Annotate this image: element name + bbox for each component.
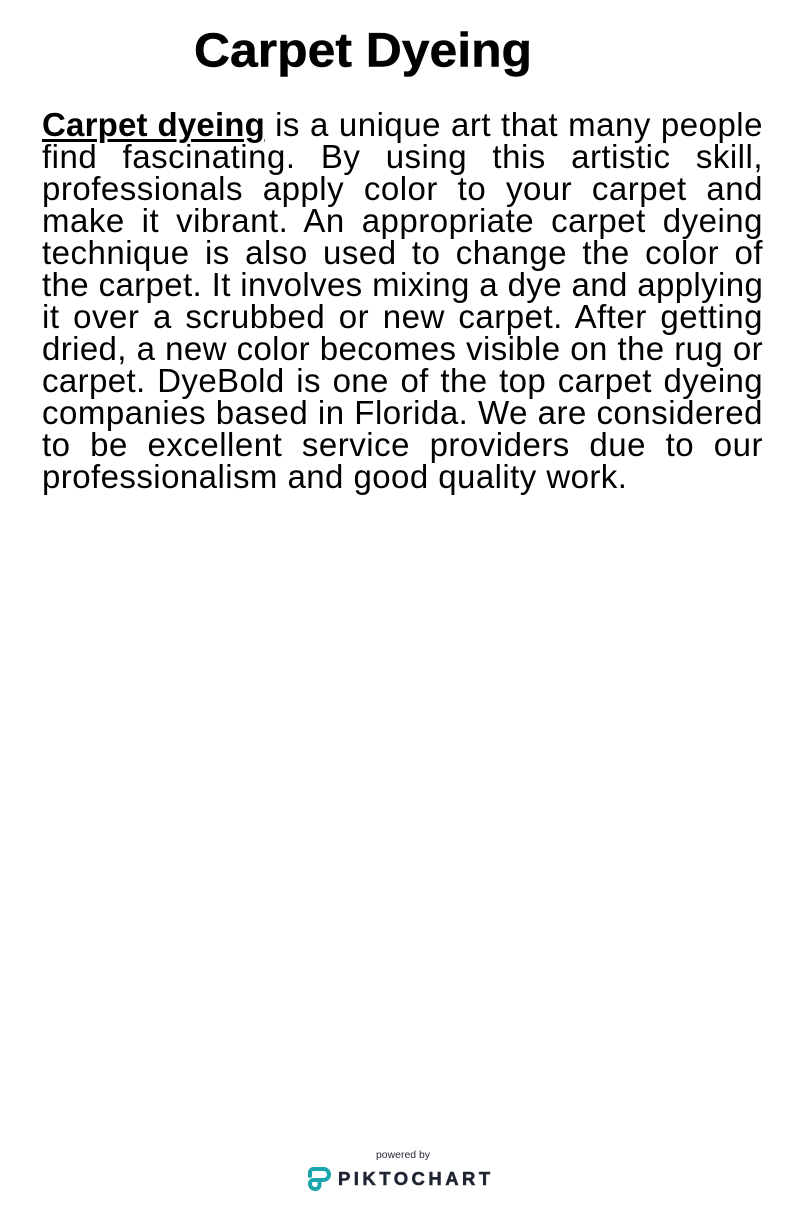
text block: carpet dyeing description: to be excellent service providers due to our bbox=[42, 426, 763, 463]
text block: carpet dyeing description: the carpet. It involves mixing a dye and applying bbox=[42, 266, 763, 303]
text block: carpet dyeing description: Carpet dyeing is a unique art that many people bbox=[42, 106, 763, 143]
icon: Piktochart P mark bbox=[310, 1169, 329, 1189]
text block: carpet dyeing description: make it vibrant. An appropriate carpet dyeing bbox=[42, 202, 763, 239]
text block: carpet dyeing description: professionals apply color to your carpet and bbox=[42, 170, 763, 207]
powered by label: powered by bbox=[376, 1150, 430, 1161]
Piktochart wordmark: PIKTOCHART bbox=[338, 1168, 493, 1189]
text block: carpet dyeing description bbox=[42, 106, 763, 495]
text block: carpet dyeing description: it over a scrubbed or new carpet. After getting bbox=[42, 298, 763, 335]
footer: powered by Piktochart logo bbox=[308, 1150, 493, 1191]
text block: carpet dyeing description: technique is also used to change the color of bbox=[42, 234, 763, 271]
text block: carpet dyeing description: find fascinating. By using this artistic skill, bbox=[42, 138, 763, 175]
text block: carpet dyeing description: carpet. DyeBold is one of the top carpet dyeing bbox=[42, 362, 763, 399]
text block: carpet dyeing description: professionalism and good quality work. bbox=[42, 458, 627, 495]
text block: carpet dyeing description: companies based in Florida. We are considered bbox=[42, 394, 763, 431]
title: Carpet Dyeing bbox=[194, 24, 532, 78]
text block: carpet dyeing description: dried, a new color becomes visible on the rug or bbox=[42, 330, 763, 367]
